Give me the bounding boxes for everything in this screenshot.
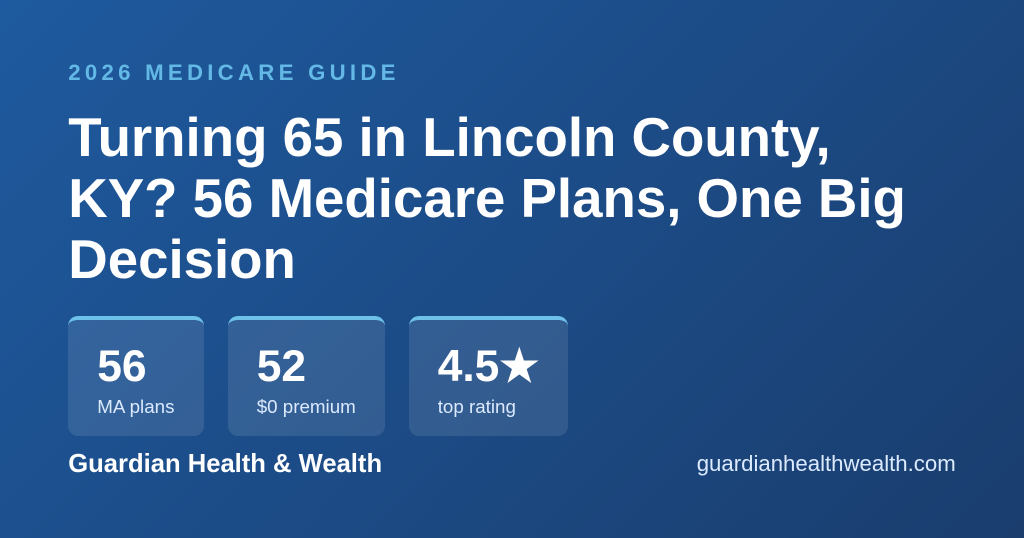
title: Turning 65 in Lincoln County, [68,107,831,168]
stat label: $0 premium: $0 premium [257,396,356,417]
stat value: 56: 56 [97,342,147,391]
title: Decision [68,229,296,290]
stat label: MA plans: MA plans [97,396,174,417]
eyebrow label: 2026 MEDICARE GUIDE [68,60,400,85]
stat card: top rating [409,316,568,436]
stat card: $0 premium [228,316,385,436]
website url: guardianhealthwealth.com [697,451,956,476]
stat label: top rating: top rating [438,396,516,417]
stat value: 52: 52 [257,342,306,391]
brand name: Guardian Health & Wealth [68,450,382,478]
stat value: 4.5 stars: 4.5★ [438,342,539,391]
stat card: MA plans [68,316,204,436]
title [68,107,906,290]
title: KY? 56 Medicare Plans, One Big [68,168,906,229]
